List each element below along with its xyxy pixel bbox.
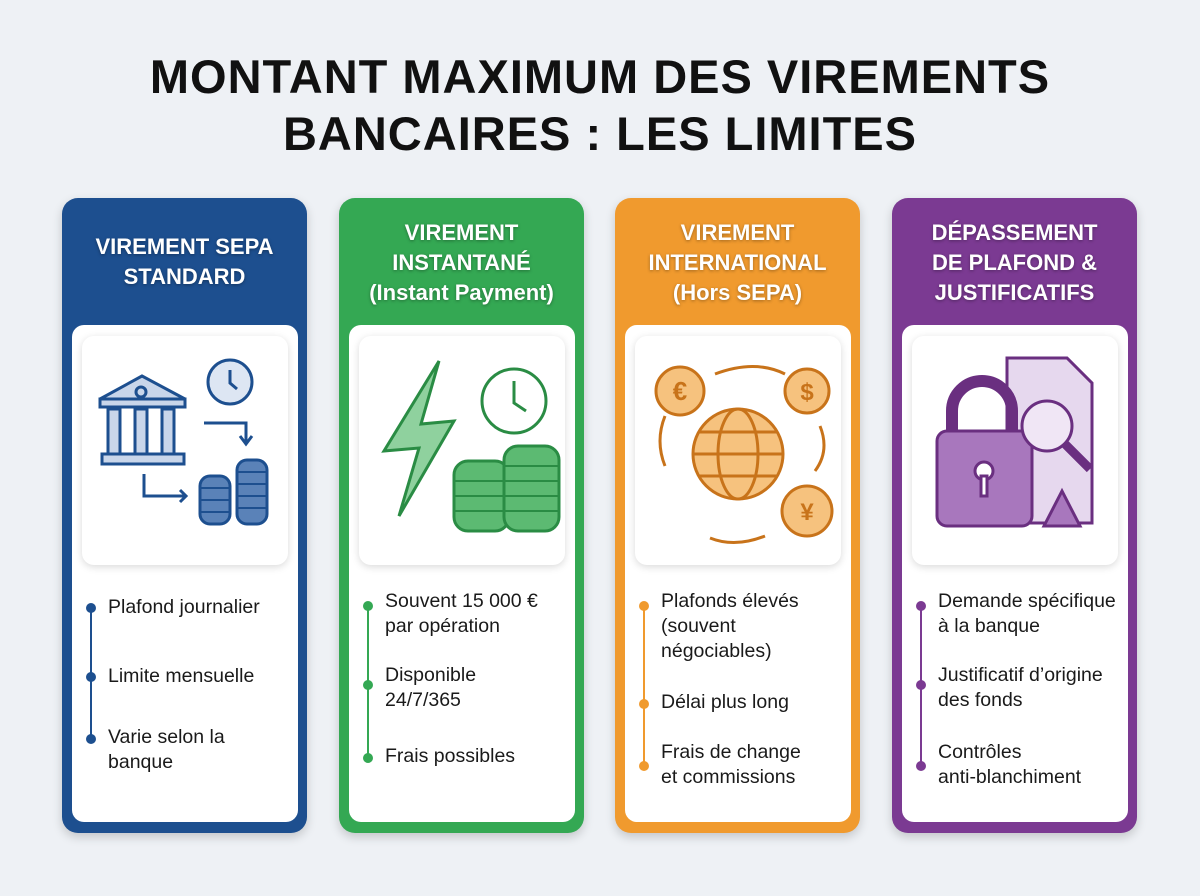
bullet list: Frais de change (661, 741, 801, 763)
bullet list: (souvent (661, 615, 736, 637)
content panel (625, 325, 851, 822)
heading: (Hors SEPA) (673, 280, 802, 305)
icon: bank (82, 336, 288, 565)
heading: VIREMENT (681, 220, 794, 245)
bullet list: Souvent 15 000 € (385, 590, 538, 612)
bullet list: Disponible (385, 664, 476, 686)
heading: DÉPASSEMENT (932, 220, 1097, 245)
bullet list: Plafond journalier (108, 596, 260, 618)
bullet list (363, 590, 538, 767)
bullet list: Contrôles (938, 741, 1021, 763)
bullet list: Délai plus long (661, 691, 789, 713)
heading: STANDARD (124, 264, 245, 289)
bullet list: Frais possibles (385, 745, 515, 767)
heading (368, 220, 554, 307)
icon: globe with currencies: $ (800, 379, 814, 406)
title (150, 50, 1050, 160)
heading: DE PLAFOND & (932, 250, 1097, 275)
panel: SEPA standard (62, 198, 307, 833)
bullet list: à la banque (938, 615, 1040, 637)
bullet list: Demande spécifique (938, 590, 1116, 612)
bullet list: banque (108, 751, 173, 773)
heading: (Instant Payment) (369, 280, 554, 305)
heading: VIREMENT SEPA (95, 234, 274, 259)
bullet list (916, 590, 1116, 788)
bullet list: anti-blanchiment (938, 766, 1081, 788)
title: MONTANT MAXIMUM DES VIREMENTS (150, 50, 1050, 103)
heading (932, 220, 1098, 305)
bullet list: par opération (385, 615, 500, 637)
heading: JUSTIFICATIFS (935, 280, 1094, 305)
bullet list: Varie selon la (108, 726, 225, 748)
icon: globe with currencies (635, 336, 841, 565)
bullet list (86, 596, 260, 773)
heading (95, 234, 274, 289)
content panel (349, 325, 575, 822)
icon: globe with currencies: € (673, 376, 687, 406)
bullet list: Plafonds élevés (661, 590, 799, 612)
panel: instant payment (339, 198, 584, 833)
bullet list (639, 590, 801, 788)
panel: dépassement (892, 198, 1137, 833)
content panel (902, 325, 1128, 822)
bullet list: Justificatif d’origine (938, 664, 1103, 686)
bullet list: négociables) (661, 640, 772, 662)
bullet list: des fonds (938, 689, 1023, 711)
icon: globe with currencies: ¥ (800, 499, 814, 526)
bullet list: 24/7/365 (385, 689, 461, 711)
bullet list: et commissions (661, 766, 795, 788)
bullet list: Limite mensuelle (108, 665, 254, 687)
heading: VIREMENT (405, 220, 518, 245)
title: BANCAIRES : LES LIMITES (283, 107, 917, 160)
icon: lock and document (912, 336, 1118, 565)
content panel (72, 325, 298, 822)
heading (648, 220, 828, 307)
icon: lightning (359, 336, 565, 565)
panel: international (615, 198, 860, 833)
heading: INSTANTANÉ (392, 250, 531, 275)
heading: INTERNATIONAL (648, 250, 827, 275)
